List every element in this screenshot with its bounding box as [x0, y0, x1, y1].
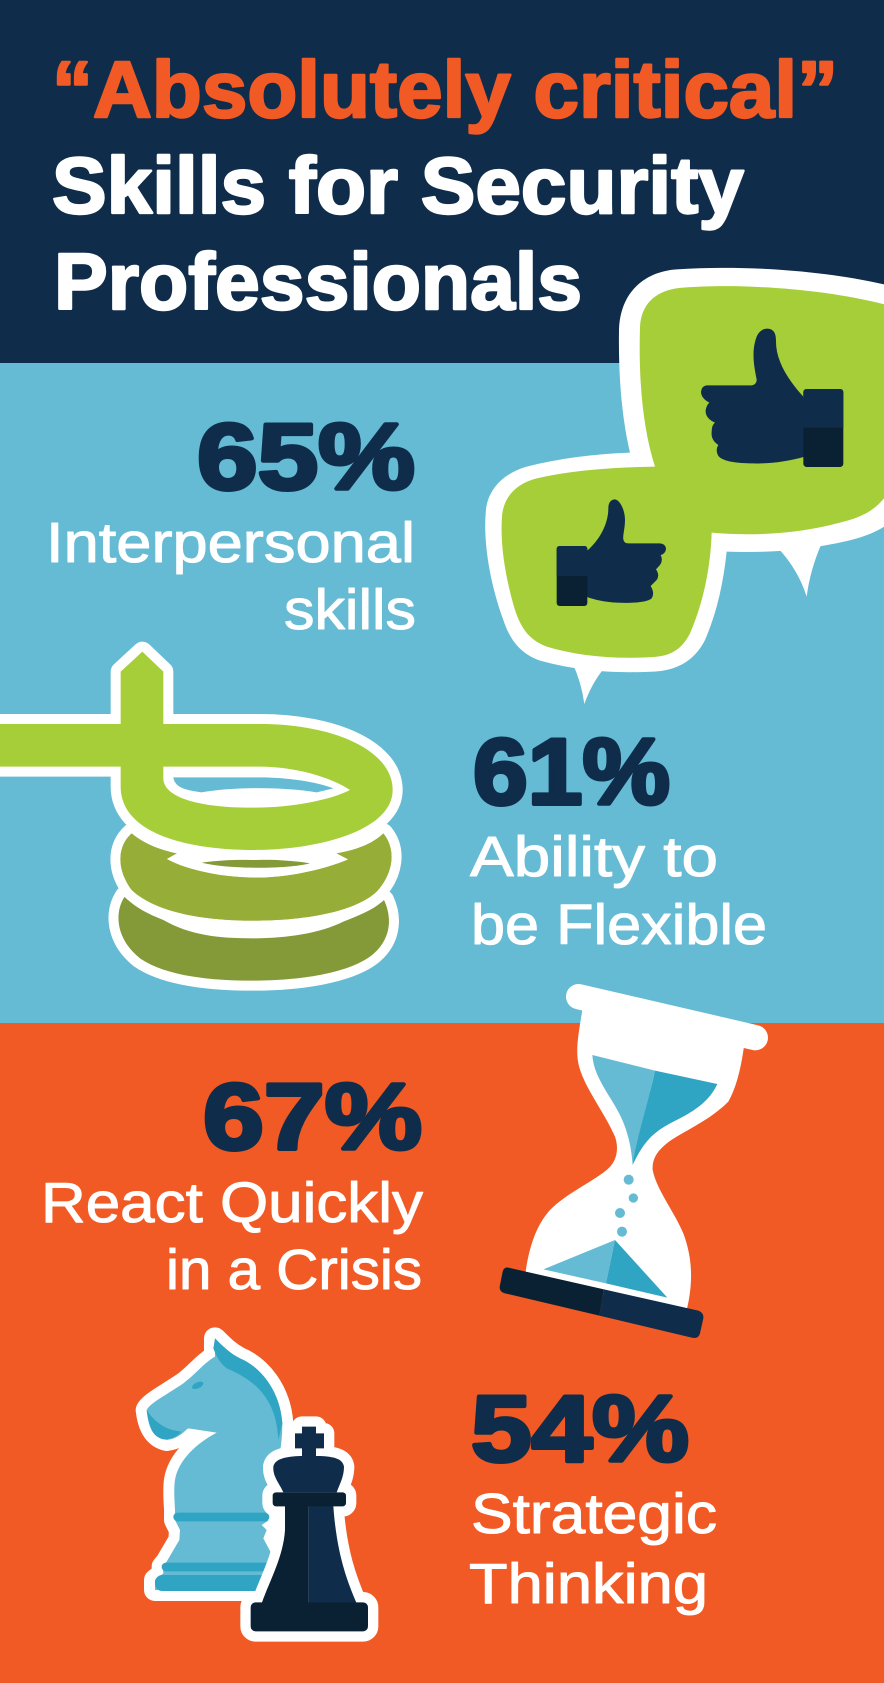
icon: chess king — [251, 1427, 368, 1631]
stat: 61% ability to be flexible — [470, 719, 767, 957]
stat: 67% react quickly in a crisis: in a Crisis — [166, 1238, 422, 1302]
icon: small thumb — [557, 499, 666, 606]
stat: 67% react quickly in a crisis: 67% — [203, 1064, 422, 1169]
stat: 54% strategic thinking: Thinking — [469, 1552, 708, 1616]
icon: speech bubbles with thumbs up — [485, 268, 884, 704]
stat: 65% interpersonal skills: Interpersonal — [46, 511, 415, 575]
stat: 54% strategic thinking: 54% — [471, 1376, 689, 1481]
stat: 54% strategic thinking: Strategic — [471, 1482, 717, 1546]
icon: flexible knotted arrow coil — [0, 652, 393, 981]
icon: chess knight and king — [147, 1338, 368, 1631]
icon: hourglass — [500, 997, 755, 1338]
stat: 61% ability to be flexible: be Flexible — [471, 893, 767, 957]
stat: 61% ability to be flexible: Ability to — [470, 825, 718, 889]
title: Professionals — [54, 237, 582, 326]
stat: 54% strategic thinking — [469, 1376, 717, 1616]
panel: header background — [0, 0, 884, 363]
stat: 65% interpersonal skills: skills — [284, 578, 416, 642]
stat: 67% react quickly in a crisis — [41, 1064, 424, 1302]
panel: blue section background — [0, 363, 884, 1023]
stat: 67% react quickly in a crisis: React Quickly — [41, 1171, 424, 1235]
icon: chess knight — [147, 1338, 282, 1591]
stat: 65% interpersonal skills — [46, 404, 416, 642]
title: “Absolutely critical” — [52, 45, 838, 134]
panel: orange section background — [0, 1023, 884, 1683]
icon: large thumb — [701, 329, 843, 467]
stat: 61% ability to be flexible: 61% — [473, 719, 670, 824]
title — [52, 45, 838, 326]
stat: 65% interpersonal skills: 65% — [197, 404, 415, 509]
title: Skills for Security — [52, 141, 745, 230]
